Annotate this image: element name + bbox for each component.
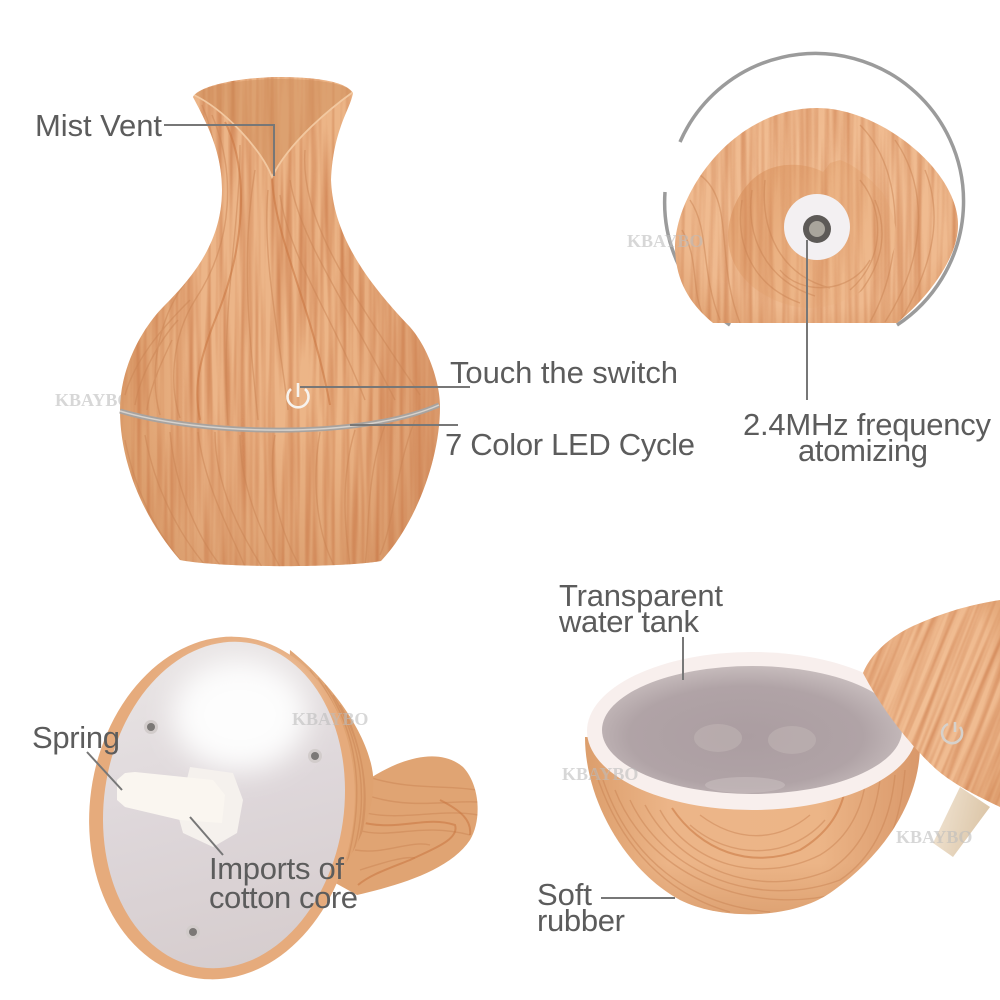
icon: lid power symbol <box>942 722 962 743</box>
label: Mist Vent: Mist Vent <box>35 108 162 143</box>
icon: transparent tank interior <box>602 666 902 794</box>
panel: atomizer top view <box>627 53 992 468</box>
label: Mist Vent <box>35 108 274 176</box>
label: Soft rubber <box>537 877 675 938</box>
label: Transparent water tank: water tank <box>558 604 700 639</box>
label: Spring: Spring <box>32 720 120 755</box>
icon: touch switch <box>288 383 309 407</box>
icon: white silicone rim <box>587 652 917 810</box>
icon: translucent lid underside <box>82 626 366 984</box>
icon: wood dome body <box>290 650 374 862</box>
watermark: KBAYBO <box>292 709 368 729</box>
label: Imports of cotton core <box>190 817 358 915</box>
watermark: KBAYBO <box>896 827 972 847</box>
label: Transparent water tank: Transparent <box>559 578 723 613</box>
icon: white glow <box>172 659 308 771</box>
watermark: KBAYBO <box>562 764 638 784</box>
panel: underside of lid <box>32 619 478 997</box>
label: 2.4MHz frequency atomizing <box>743 240 992 468</box>
icon: spring and cotton core <box>117 767 243 847</box>
icon: wood dome top <box>675 108 958 323</box>
watermark: KBAYBO <box>55 390 131 410</box>
panel: open water tank <box>538 585 1000 932</box>
icon: vase neck <box>330 756 478 895</box>
icon: screws <box>144 720 322 939</box>
decorative ring <box>665 53 964 325</box>
label: 2.4MHz frequency atomizing: 2.4MHz frequency <box>743 407 992 442</box>
icon: wood vase body <box>110 70 450 580</box>
label: Touch the switch: Touch the switch <box>450 355 678 390</box>
label: Spring <box>32 720 122 790</box>
icon: wood bowl <box>580 730 925 920</box>
icon: dome rim <box>67 619 377 997</box>
label: 7 Color LED Cycle: 7 Color LED Cycle <box>445 427 695 462</box>
label: Soft rubber: rubber <box>537 903 625 938</box>
label: Transparent water tank <box>558 578 723 680</box>
label: 2.4MHz frequency atomizing: atomizing <box>798 433 928 468</box>
icon: lid piece <box>863 600 1000 807</box>
watermark: KBAYBO <box>627 231 703 251</box>
label: Imports of cotton core: cotton core <box>209 880 358 915</box>
icon: nozzle stem <box>933 787 990 857</box>
icon: recessed well <box>728 160 896 304</box>
panel: full humidifier with labels <box>35 70 695 580</box>
label: Imports of cotton core: Imports of <box>209 851 344 886</box>
icon: white atomizer disc <box>784 194 850 260</box>
label: Soft rubber: Soft <box>537 877 592 912</box>
